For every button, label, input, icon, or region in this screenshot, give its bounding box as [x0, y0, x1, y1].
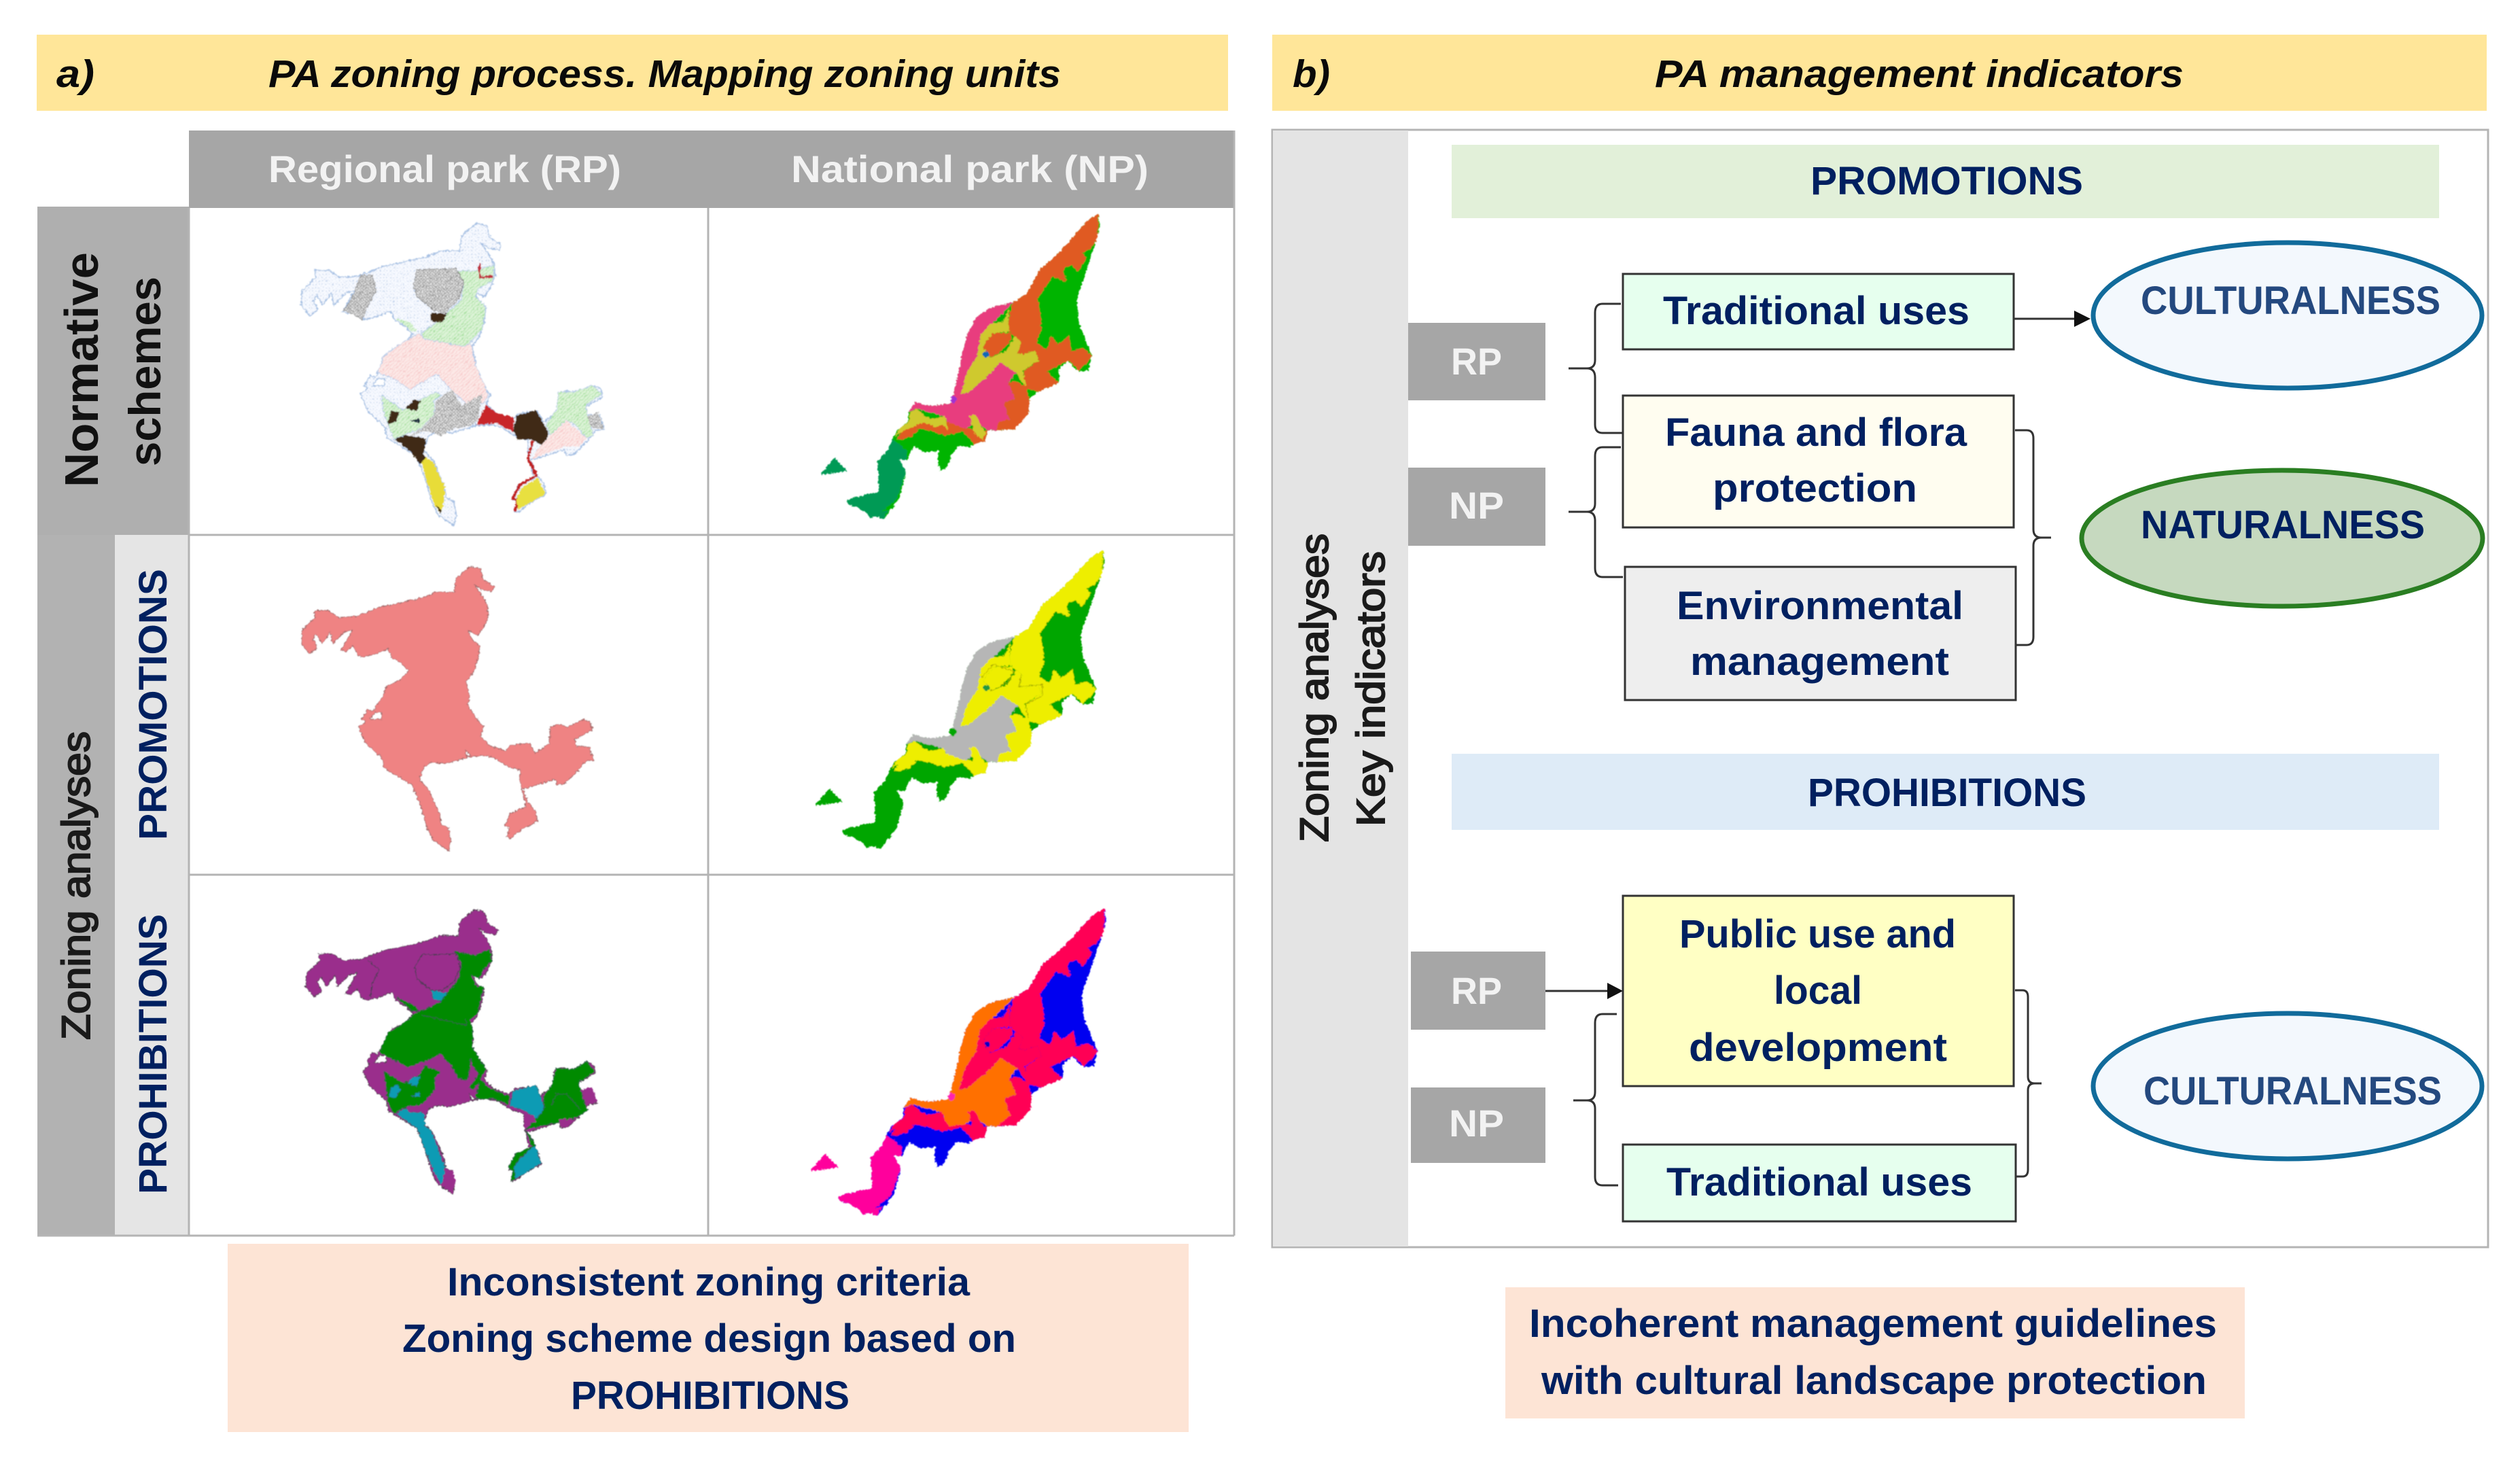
row header: normative schemes: schemes — [120, 277, 170, 466]
box: public use and local development: local — [1774, 969, 1862, 1013]
callout: incoherent management guidelines — [1505, 1287, 2245, 1418]
ellipse: naturalness: NATURALNESS — [2141, 503, 2425, 547]
band: prohibitions — [1452, 754, 2439, 830]
row header: promotions: PROMOTIONS — [131, 569, 175, 840]
row header: normative schemes: Normative — [55, 252, 108, 487]
bracket: NP lower — [1573, 1014, 1618, 1185]
table column headers: Regional park (RP) — [268, 147, 621, 190]
tag: RP lower — [1411, 952, 1545, 1030]
box: traditional uses lower: Traditional uses — [1666, 1160, 1972, 1204]
callout: inconsistent zoning criteria: PROHIBITIONS — [571, 1374, 850, 1418]
bracket: naturalness group — [2015, 430, 2051, 645]
panel b frame and side label — [1272, 130, 2488, 1247]
tag: NP upper — [1408, 468, 1545, 546]
box: public use and local development — [1623, 896, 2014, 1086]
row header: prohibitions: PROHIBITIONS — [131, 914, 175, 1194]
map: regional park promotions — [301, 566, 594, 851]
ellipse: culturalness upper — [2093, 243, 2482, 388]
panel b frame and side label: Zoning analyses — [1293, 534, 1337, 842]
ellipse: culturalness lower: CULTURALNESS — [2143, 1069, 2442, 1113]
tag: NP lower: NP — [1449, 1102, 1504, 1145]
panel b frame and side label: Key indicators — [1349, 551, 1393, 826]
tag: RP upper — [1408, 323, 1545, 400]
callout: inconsistent zoning criteria: Inconsistent zoning criteria — [447, 1260, 970, 1304]
band: prohibitions: PROHIBITIONS — [1808, 771, 2086, 815]
box: public use and local development: Public use and — [1679, 912, 1956, 956]
map: regional park prohibitions — [306, 909, 597, 1194]
map: national park promotions — [816, 551, 1104, 850]
map: national park normative scheme — [821, 214, 1100, 520]
box: traditional uses — [1623, 274, 2014, 349]
map: regional park normative scheme — [301, 223, 604, 525]
box: environmental management: management — [1690, 640, 1949, 684]
panel a header bar — [37, 35, 1228, 111]
tag: RP lower: RP — [1451, 969, 1502, 1012]
ellipse: culturalness lower — [2093, 1013, 2482, 1159]
panel a header bar: PA zoning process. Mapping zoning units — [268, 52, 1061, 96]
row header: zoning analyses — [37, 535, 115, 1236]
box: fauna and flora protection: Fauna and flora — [1665, 411, 1967, 455]
panel b header bar: PA management indicators — [1655, 52, 2184, 96]
tag: NP upper: NP — [1449, 484, 1504, 527]
row header: zoning analyses: Zoning analyses — [54, 731, 99, 1040]
row header: prohibitions — [115, 875, 189, 1236]
panel b header bar: b) — [1293, 52, 1330, 96]
ellipse: naturalness — [2082, 470, 2483, 606]
arrow: RP to public use — [1545, 983, 1623, 999]
box: environmental management: Environmental — [1677, 584, 1963, 628]
box: public use and local development: development — [1689, 1026, 1947, 1070]
callout: incoherent management guidelines: Incoherent management guidelines — [1529, 1302, 2217, 1346]
box: traditional uses: Traditional uses — [1663, 289, 1970, 333]
map: national park prohibitions — [811, 909, 1106, 1217]
callout: inconsistent zoning criteria — [228, 1244, 1189, 1432]
bracket: NP upper — [1569, 447, 1623, 577]
row header: normative schemes — [37, 207, 189, 535]
bracket: culturalness lower group — [2015, 990, 2042, 1177]
box: fauna and flora protection: protection — [1713, 466, 1917, 510]
box: fauna and flora protection — [1623, 396, 2014, 527]
tag: NP lower — [1411, 1087, 1545, 1163]
box: environmental management — [1625, 567, 2016, 700]
panel b: management indicators — [1272, 35, 2488, 1418]
band: promotions: PROMOTIONS — [1810, 159, 2083, 203]
ellipse: culturalness upper: CULTURALNESS — [2141, 279, 2440, 323]
callout: inconsistent zoning criteria: Zoning scheme design based on — [402, 1317, 1016, 1361]
table column headers — [189, 130, 1234, 208]
band: promotions — [1452, 145, 2439, 218]
panel a: zoning process — [37, 35, 1234, 1432]
panel b header bar — [1272, 35, 2487, 111]
table column headers: National park (NP) — [791, 147, 1149, 190]
row header: promotions — [115, 535, 189, 875]
panel a header bar: a) — [56, 52, 94, 96]
arrow: traditional uses to culturalness — [2014, 311, 2090, 327]
bracket: RP upper — [1569, 304, 1623, 433]
callout: incoherent management guidelines: with cultural landscape protection — [1541, 1359, 2207, 1403]
tag: RP upper: RP — [1451, 340, 1502, 383]
box: traditional uses lower — [1623, 1145, 2016, 1221]
